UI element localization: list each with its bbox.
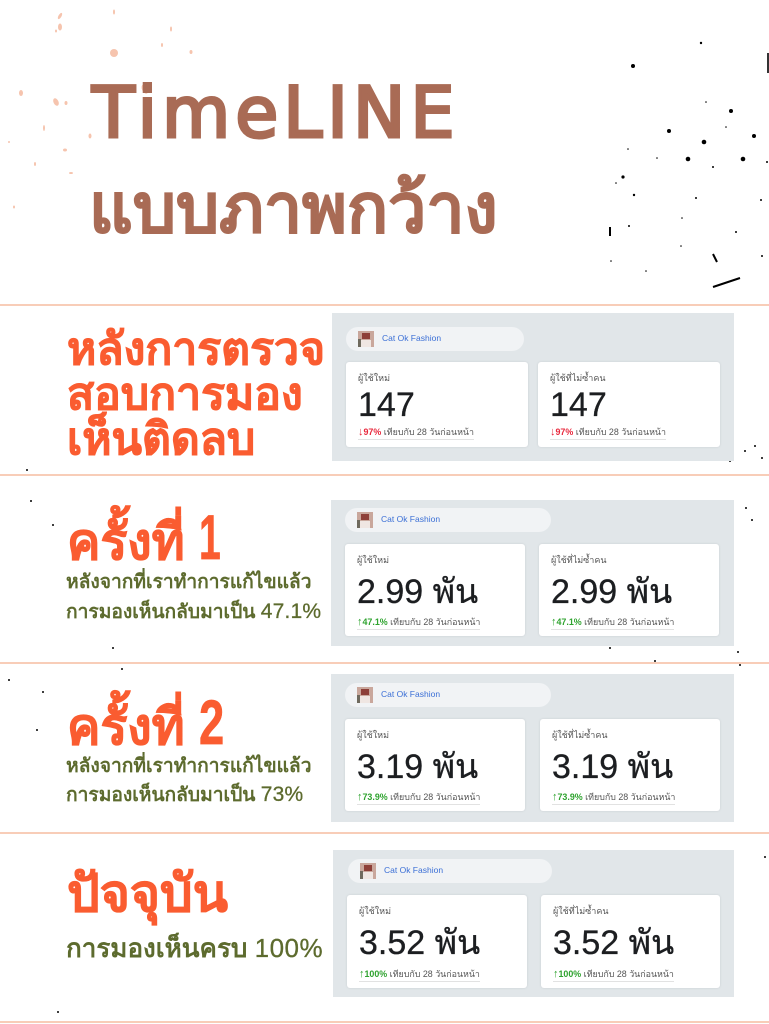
card reach: 147 (550, 386, 607, 424)
section 2 heading: 1 (199, 503, 220, 573)
section 3 text: หลังจากที่เราทำการแก้ไขแล้ว (66, 756, 311, 777)
section 4 text: การมองเห็นครบ 100% (66, 933, 323, 963)
section 2 text: การมองเห็นกลับมาเป็น 47.1% (66, 600, 321, 623)
card new users: ↓97% เทียบกับ 28 วันก่อนหน้า (358, 426, 474, 438)
section 1 heading: สอบการมอง (67, 370, 303, 419)
card new users: ผู้ใช้ใหม่ (359, 906, 391, 916)
card new users: 147 (358, 386, 415, 424)
card new users (347, 895, 527, 988)
panel: first fix (331, 500, 734, 646)
card new users: 2.99 พัน (357, 573, 478, 611)
card new users: ผู้ใช้ใหม่ (357, 730, 389, 740)
section 2 heading: ครั้งที่ (67, 514, 185, 570)
page pill: Cat Ok Fashion (381, 514, 440, 524)
card new users: ↑100% เทียบกับ 28 วันก่อนหน้า (359, 968, 480, 980)
card new users: 3.52 พัน (359, 924, 480, 962)
page pill (346, 327, 524, 351)
page pill: Cat Ok Fashion (382, 333, 441, 343)
section 2 text: หลังจากที่เราทำการแก้ไขแล้ว (66, 572, 311, 593)
card new users (346, 362, 528, 447)
title: แบบภาพกว้าง (89, 171, 498, 247)
card reach (538, 362, 720, 447)
card reach: ↑73.9% เทียบกับ 28 วันก่อนหน้า (552, 791, 675, 803)
title: TimeLINE (92, 72, 460, 154)
card reach (540, 719, 720, 811)
right edge mark (767, 53, 769, 73)
page pill (345, 508, 551, 532)
card new users: ผู้ใช้ใหม่ (357, 555, 389, 565)
card reach: ผู้ใช้ที่ไม่ซ้ำคน (551, 555, 607, 565)
section 3 text (66, 752, 311, 806)
card new users (345, 719, 525, 811)
section 3 heading: 2 (199, 688, 224, 758)
title (89, 72, 498, 247)
section 3 heading (67, 688, 224, 758)
icon: brush strokes (609, 227, 740, 288)
card reach: ผู้ใช้ที่ไม่ซ้ำคน (553, 906, 609, 916)
card reach (539, 544, 719, 636)
section 4 heading: ปัจจุบัน (67, 864, 228, 922)
section 1 heading: หลังการตรวจ (67, 325, 325, 374)
card new users: ↑47.1% เทียบกับ 28 วันก่อนหน้า (357, 616, 480, 628)
section 2 heading (67, 503, 220, 573)
panel: before (332, 313, 734, 461)
card reach: ↓97% เทียบกับ 28 วันก่อนหน้า (550, 426, 666, 438)
section 3 text: การมองเห็นกลับมาเป็น 73% (66, 783, 303, 806)
card reach: 3.52 พัน (553, 924, 674, 962)
divider lines (0, 304, 769, 306)
card reach: ↑100% เทียบกับ 28 วันก่อนหน้า (553, 968, 674, 980)
card reach: ผู้ใช้ที่ไม่ซ้ำคน (550, 373, 606, 383)
section 1 heading: เห็นติดลบ (67, 415, 255, 464)
page pill (348, 859, 552, 883)
page pill: Cat Ok Fashion (381, 689, 440, 699)
card new users (345, 544, 525, 636)
page pill (345, 683, 551, 707)
section 3 heading: ครั้งที่ (67, 699, 185, 755)
card reach: ผู้ใช้ที่ไม่ซ้ำคน (552, 730, 608, 740)
card reach: 3.19 พัน (552, 748, 673, 786)
card reach: 2.99 พัน (551, 573, 672, 611)
panel: current (333, 850, 734, 997)
card new users: ↑73.9% เทียบกับ 28 วันก่อนหน้า (357, 791, 480, 803)
page pill: Cat Ok Fashion (384, 865, 443, 875)
panel: second fix (331, 674, 734, 822)
card reach: ↑47.1% เทียบกับ 28 วันก่อนหน้า (551, 616, 674, 628)
section 2 text (66, 568, 321, 623)
card new users: ผู้ใช้ใหม่ (358, 373, 390, 383)
card reach (541, 895, 720, 988)
section 1 heading (67, 325, 325, 464)
card new users: 3.19 พัน (357, 748, 478, 786)
